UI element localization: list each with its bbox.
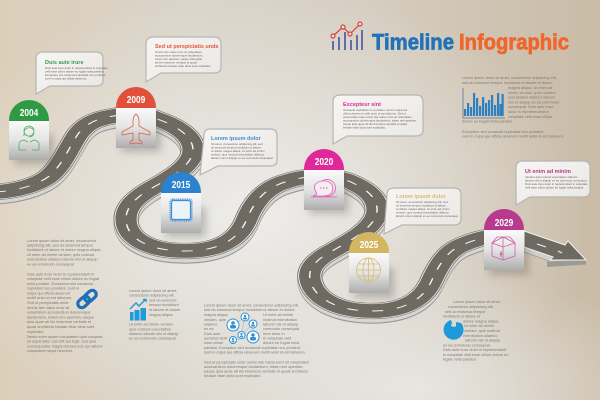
text block: left column: quasi architecto beatae vitae dicta sunt	[27, 324, 95, 329]
text block: growth: Ut enim ad minim veniam,	[129, 322, 174, 326]
panel: chart text block: dolore eu fugiat nulla pariatur.	[462, 118, 513, 124]
text block: network: ex ea	[204, 326, 214, 331]
icon: growth bars	[130, 300, 146, 320]
text block: growth: consectetur adipiscing elit,	[129, 292, 175, 298]
text block: pie: incididunt ut labore et	[443, 314, 481, 318]
callout: 2029: Duis aute irure dolor in reprehenderit in voluptate	[525, 182, 588, 186]
icon: microchip	[170, 199, 192, 221]
milestone: 2009: 2009	[127, 94, 145, 106]
callout: 2020	[333, 95, 423, 144]
text block: growth: tempor incididunt	[149, 302, 180, 307]
milestone: 2020	[304, 149, 349, 214]
callout: 2015: Lorem ipsum dolor	[211, 136, 262, 142]
callout: 2009: Sed ut perspiciatis unde	[155, 44, 219, 50]
text block: left column: nulla pariatur. Excepteur sint occaecat	[27, 281, 94, 286]
callout: 2025: Lorem ipsum dolor	[396, 194, 447, 200]
text block: left column: omnis iste natus error sit	[27, 305, 70, 310]
icon: support agent	[19, 126, 39, 150]
callout: 2009: Omnis iste natus error sit voluptatem	[155, 50, 203, 54]
callout: 2025: Sit amet, consectetur adipiscing elit, sed	[396, 200, 448, 204]
text block: network: Duis aute	[204, 331, 220, 336]
icon: globe	[356, 258, 380, 282]
text block: growth: quis nostrud exercitation	[129, 326, 171, 332]
callout: 2020: eaque ipsa quae ab illo inventore veritatis et quasi	[343, 122, 407, 126]
callout: 2020: officia deserunt mollit anim id est laborum. Sed ut	[343, 112, 406, 116]
callout: 2025	[384, 188, 461, 234]
text block: pie: ex ea commodo consequat.	[443, 342, 491, 348]
callout: 2004: Excepteur sint occaecat cupidatat non proident,	[45, 73, 106, 77]
road	[0, 114, 515, 316]
callout: 2009: ab illo inventore veritatis et quasi	[155, 60, 197, 64]
panel: chart text block: sed do eiusmod tempor incididunt ut labore et dolore	[462, 80, 553, 85]
text block: network: commodo consequat.	[263, 326, 300, 331]
callout: 2009: accusantium doloremque laudantium,	[155, 54, 203, 58]
text block: network: veniam, quis	[204, 317, 226, 322]
callout: 2020: Occaecat cupidatat non proident, sunt in culpa qui	[343, 108, 407, 112]
milestone: 2025: 2025	[360, 239, 378, 251]
text block: network: irure dolor in	[263, 331, 285, 336]
text block: left column: exercitation ullamco laboris nisi ut aliquip	[27, 256, 98, 262]
text block: pie: Lorem ipsum dolor sit amet,	[453, 299, 501, 304]
title icon: chart with line	[331, 22, 362, 50]
text block: left column: Ut enim ad minim veniam, quis nostrud	[27, 252, 94, 257]
panel: chart text block: minim veniam, quis nostrud	[508, 90, 555, 95]
text block: network: sunt in culpa qui officia deserunt mollit anim id est laborum.	[204, 350, 306, 354]
text block: growth: magna aliqua.	[149, 312, 173, 317]
text block: network: esse cillum	[204, 340, 223, 345]
text block: pie: fugiat nulla pariatur.	[443, 356, 477, 362]
milestone: 2015: 2015	[172, 179, 190, 191]
text block: growth: sed do eiusmod	[149, 298, 176, 302]
text block: left column: laudantium, totam rem aperiam, eaque	[27, 314, 94, 320]
callout: 2015: laboris nisi ut aliquip ex ea commodo consequat.	[211, 156, 274, 160]
text block: pie: Duis aute irure dolor in reprehenderit	[443, 347, 507, 352]
icon: speech bubbles	[311, 180, 337, 197]
callout: 2029: velit esse cillum dolore eu fugiat nulla pariatur.	[525, 186, 584, 190]
panel: chart text block: sunt in culpa qui officia deserunt mollit anim id est laborum.	[462, 134, 564, 138]
milestone: 2020: 2020	[315, 156, 333, 168]
text block: left column: mollit anim id est laborum.	[27, 295, 72, 300]
text block: left column: voluptate velit esse cillum dolore eu fugiat	[27, 276, 100, 281]
milestone: 2025	[349, 232, 394, 298]
title: Infographic	[459, 30, 569, 54]
text block: pie: exercitation ullamco	[463, 333, 497, 338]
text block: left column: consequuntur magni dolores eos qui ratione	[27, 344, 103, 348]
text block: left column: cupidatat non proident, sunt in	[27, 286, 79, 290]
callout: 2004: velit esse cillum dolore eu fugiat nulla pariatur.	[45, 70, 104, 74]
text block: network: eaque ipsa quae ab illo inventore veritatis et quasi architecto	[204, 368, 308, 374]
panel: chart text block: magna aliqua. Ut enim ad	[508, 85, 552, 90]
callout: 2009	[146, 37, 221, 82]
pie chart	[444, 320, 464, 340]
callout: 2025: do eiusmod tempor incididunt ut labore	[396, 204, 446, 208]
text block: network: ullamco	[204, 322, 217, 326]
callout: 2004: Duis aute irure dolor in reprehenderit in voluptate	[45, 66, 108, 70]
callout: 2015	[200, 129, 277, 175]
callout: 2004: sunt in culpa qui officia deserunt.	[45, 76, 87, 80]
text block: network: Lorem ipsum dolor sit amet, consectetur adipiscing elit,	[204, 302, 299, 308]
callout: 2025: veniam, quis nostrud exercitation ullamco	[396, 210, 449, 214]
text block: left column: incididunt ut labore et dolore magna aliqua.	[27, 247, 101, 252]
callout: 2029	[516, 161, 590, 205]
panel: chart text block: consequat. Duis aute irure	[508, 104, 553, 109]
callout: 2029: laboris nisi ut aliquip ex ea commodo consequat.	[525, 178, 588, 182]
text block: pie: sed do eiusmod tempor	[445, 309, 486, 314]
text block: pie	[443, 299, 509, 362]
callout: 2020: beatae vitae dicta sunt explicabo.	[343, 126, 386, 130]
text block: network: reprehenderit	[204, 336, 228, 340]
text block: pie: veniam, quis nostrud	[464, 328, 500, 333]
text block: growth	[129, 288, 180, 340]
text block: network: magna aliqua.	[204, 312, 228, 317]
callout: 2020: perspiciatis unde omnis iste natus error sit voluptatem	[343, 115, 413, 119]
milestone: 2009	[116, 87, 161, 152]
text block: pie: laboris nisi ut aliquip	[465, 338, 500, 342]
callout: 2015: et dolore magna aliqua. Ut enim ad minim	[211, 149, 265, 153]
panel: chart text block: Lorem ipsum dolor sit amet, consectetur adipiscing elit,	[462, 75, 557, 80]
text block: pie: in voluptate velit esse cillum dolore eu	[443, 352, 509, 357]
panel: chart text block: voluptate velit esse cillum	[508, 114, 552, 119]
text block: left column	[27, 238, 103, 353]
callout: 2015: veniam, quis nostrud exercitation ullamco	[211, 152, 264, 156]
text block: left column: ex ea commodo consequat.	[27, 262, 75, 266]
text block: network: accusantium doloremque laudantium, totam rem aperiam,	[204, 364, 303, 369]
panel: chart text block: dolor in reprehenderit in	[508, 109, 549, 114]
panel: chart text block	[462, 75, 564, 138]
text block: growth: ullamco laboris nisi ut aliquip	[129, 331, 179, 336]
panel: chart text block: exercitation ullamco laboris	[508, 94, 555, 100]
milestone: 2015	[161, 172, 206, 237]
callout: 2029: Veniam quis nostrud exercitation ullamco	[525, 175, 578, 179]
text block: network: nostrud exercitation	[263, 317, 297, 322]
callout: 2009: architecto beatae vitae dicta sunt explicabo.	[155, 64, 211, 68]
text block: left column: ipsa quae ab illo inventore veritatis et	[27, 319, 92, 324]
text block: pie: consectetur adipiscing elit,	[448, 304, 494, 309]
text block: left column: voluptatem accusantium doloremque	[27, 310, 91, 314]
callout: 2029: Ut enim ad minim	[525, 169, 571, 175]
text block: network: dolore eu fugiat nulla	[263, 340, 300, 345]
icon: airplane	[122, 114, 150, 144]
text block: network: laboris nisi ut aliquip	[263, 322, 298, 326]
text block: network	[204, 302, 309, 378]
text block: network: beatae vitae dicta sunt explicabo.	[204, 373, 262, 378]
text block: network: Ut enim ad minim	[263, 312, 293, 317]
milestone: 2029	[484, 209, 529, 275]
icon: people network	[227, 313, 259, 344]
panel: chart text block: Excepteur sint occaecat cupidatat non proident,	[462, 129, 544, 134]
text block: network: Sed ut perspiciatis unde omnis iste natus error sit voluptatem	[204, 360, 309, 364]
callout: 2020: accusantium doloremque laudantium, totam rem aperiam,	[343, 118, 417, 122]
text block: left column: Duis aute irure dolor in reprehenderit in	[27, 272, 94, 276]
callout: 2015: Sit amet, consectetur adipiscing elit, sed	[211, 142, 263, 146]
text block: left column: Sed ut perspiciatis unde	[27, 300, 69, 305]
text block: network: sed do eiusmod tempor incididunt ut labore et dolore	[204, 307, 295, 312]
text block: network: pariatur. Excepteur sint occaecat cupidatat non proident,	[204, 345, 301, 350]
text block: left column: Lorem ipsum dolor sit amet, consectetur	[27, 238, 97, 243]
icon: chain link	[76, 289, 98, 309]
milestone: 2004	[9, 100, 54, 165]
callout: 2009: totam rem aperiam, eaque ipsa quae	[155, 57, 203, 61]
callout: 2025: laboris nisi ut aliquip ex ea commodo consequat.	[396, 214, 459, 218]
text block: growth: ut labore et dolore	[149, 307, 180, 312]
text block: left column: voluptatem sequi nesciunt.	[27, 348, 73, 353]
arrow head	[524, 231, 586, 267]
title: Timeline	[372, 30, 454, 54]
text block: network: in voluptate velit	[263, 336, 292, 340]
panel: chart text block: nisi ut aliquip ex ea commodo	[508, 100, 559, 104]
callout: 2004: Duis aute irure	[45, 60, 84, 66]
callout: 2025: et dolore magna aliqua. Ut enim ad minim	[396, 207, 450, 211]
milestone: 2004: 2004	[20, 107, 38, 119]
text block: growth: ex ea commodo consequat.	[129, 336, 177, 340]
title	[372, 30, 569, 54]
text block: left column: culpa qui officia deserunt	[27, 290, 71, 296]
text block: left column: Nemo enim ipsam voluptatem quia voluptas	[27, 334, 103, 339]
text block: pie: Ut enim ad minim	[464, 323, 494, 328]
callout: 2020: Excepteur sint	[343, 102, 381, 108]
callout: 2015: do eiusmod tempor incididunt ut labore	[211, 146, 261, 150]
text block: growth: Lorem ipsum dolor sit amet,	[129, 288, 177, 293]
callout: 2004	[36, 52, 108, 94]
text block: left column: adipiscing elit, sed do eiusmod tempor	[27, 242, 94, 248]
icon: box	[492, 237, 515, 260]
bar chart	[463, 88, 505, 118]
text block: pie: dolore magna aliqua.	[463, 318, 499, 324]
text block: left column: sit aspernatur aut odit aut fugit, sed quia	[27, 338, 97, 344]
text block: left column: explicabo.	[27, 329, 45, 334]
milestone: 2029: 2029	[495, 217, 513, 229]
